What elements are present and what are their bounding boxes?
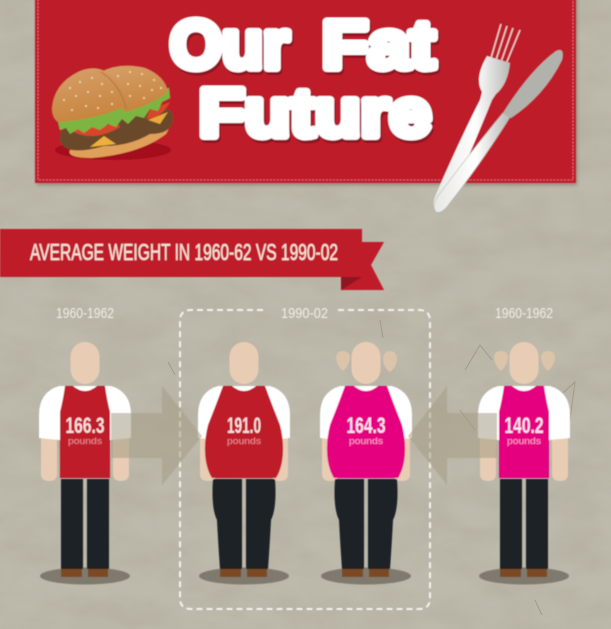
label: 1960-1962 left: 1960-1962 — [56, 305, 114, 322]
arrow: women increase — [408, 386, 497, 485]
figure: woman 1990-02: 164.3 — [346, 413, 386, 438]
figure: man 1960-62 — [39, 342, 131, 584]
figure: woman 1990-02: pounds — [349, 436, 384, 446]
label: 1990-02: 1990-02 — [281, 305, 328, 322]
title: Future — [199, 75, 431, 151]
ribbon heading: AVERAGE WEIGHT IN 1960-62 VS 1990-02 — [30, 239, 338, 265]
icon: fork — [433, 24, 520, 211]
figure: woman 1960-62 — [478, 342, 570, 584]
figure: man 1990-02 — [198, 342, 290, 584]
icon: knife — [434, 50, 563, 212]
title: Our — [172, 10, 290, 86]
label: 1960-1962 right: 1960-1962 — [495, 305, 553, 322]
sesame seeds — [63, 71, 162, 111]
figure: man 1990-02: 191.0 — [227, 413, 261, 438]
figure: man 1960-62: pounds — [68, 436, 103, 446]
icon: hamburger — [52, 66, 173, 160]
dashed box: 1990-02 — [180, 310, 430, 609]
title — [170, 7, 436, 154]
ribbon heading — [0, 229, 384, 290]
figure: woman 1960-62: 140.2 — [504, 413, 544, 438]
title: Fat — [322, 7, 435, 83]
title: Future — [200, 78, 432, 154]
panel: title banner — [35, 0, 577, 185]
title: Our — [170, 7, 289, 83]
figure: man 1990-02: pounds — [227, 436, 262, 446]
figure: man 1960-62: 166.3 — [66, 413, 104, 438]
title: Fat — [324, 10, 436, 86]
figure: woman 1990-02 — [320, 342, 412, 584]
arrow: men increase — [111, 386, 202, 485]
figure: woman 1960-62: pounds — [507, 436, 542, 446]
